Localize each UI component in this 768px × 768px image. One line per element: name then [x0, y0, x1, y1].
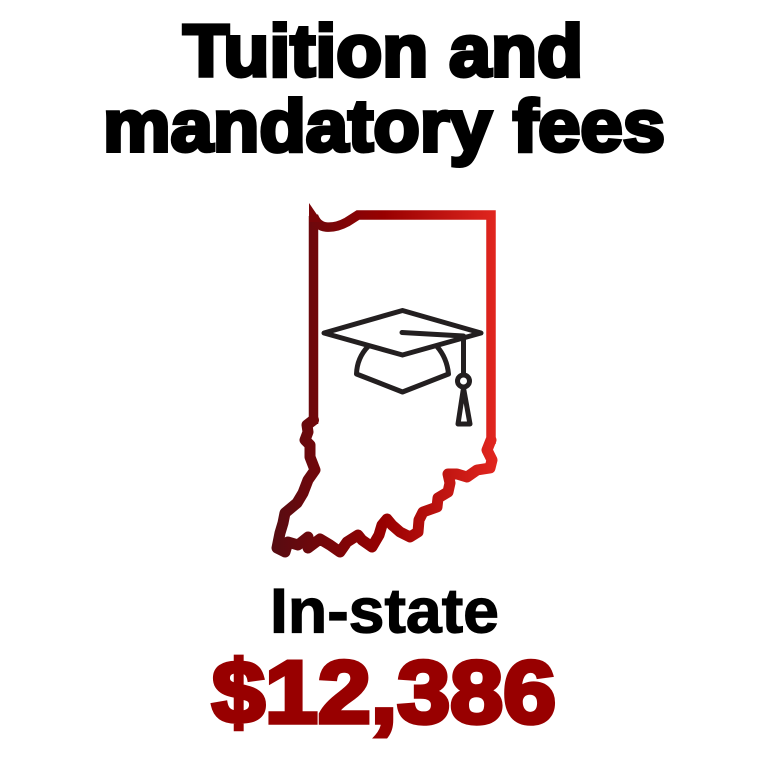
value: tuition amount: $12,386 — [212, 642, 556, 742]
map: straight north edges — [314, 215, 491, 444]
map corner: northwest spike — [309, 203, 322, 222]
icon part: cap base — [356, 346, 448, 392]
icon: graduation cap — [324, 310, 481, 424]
icon part: mortarboard — [324, 310, 481, 355]
title: mandatory fees — [103, 86, 665, 167]
title: Tuition and — [183, 11, 583, 92]
icon part: tassel knot — [458, 375, 470, 387]
label: in-state: In-state — [270, 576, 499, 646]
map: Indiana outline — [277, 215, 492, 552]
map: jagged southern border — [277, 420, 492, 552]
icon part: tassel — [458, 388, 470, 424]
title — [103, 11, 665, 167]
icon part: tassel cord — [402, 332, 464, 374]
